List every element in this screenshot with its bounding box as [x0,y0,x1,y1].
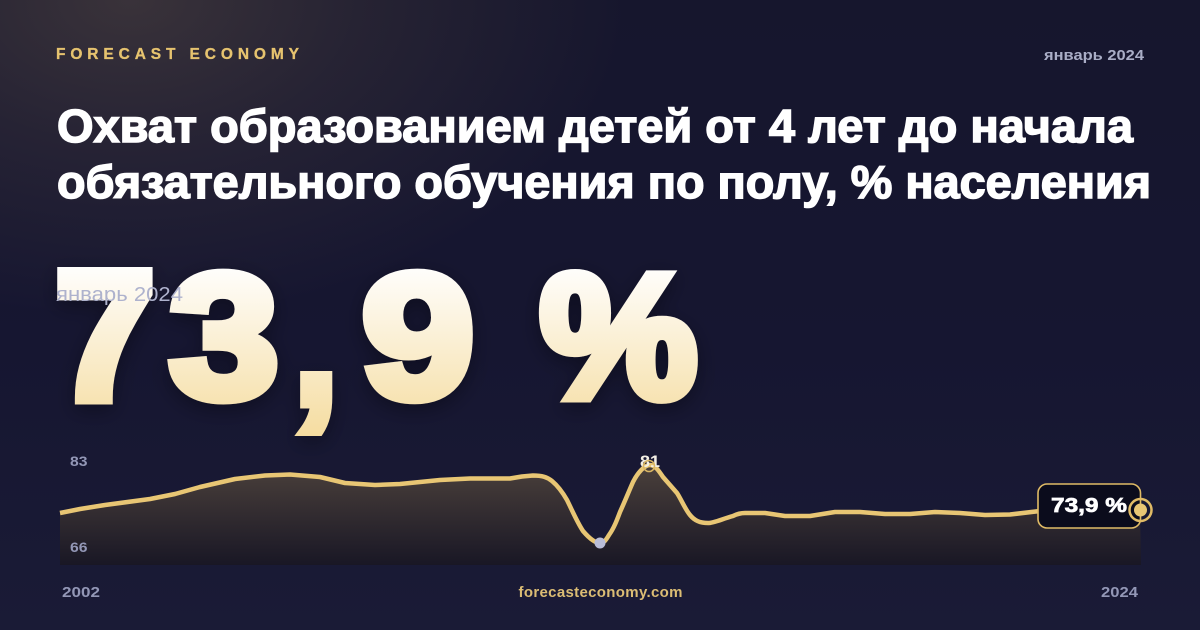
end year: 2024 [1101,584,1139,601]
start year: 2002 [62,584,100,601]
website: forecasteconomy.com [518,584,682,601]
peak label: 81 [640,452,660,471]
date label: январь 2024 [1044,47,1145,64]
peak marker [644,460,654,472]
big value [56,235,697,441]
date overlay on big value: январь 2024 [56,283,183,306]
value callout [1038,484,1140,528]
chart [60,452,1152,565]
brand label: FORECAST ECONOMY [56,46,300,63]
big value: % [540,239,697,435]
big value: , [294,242,338,441]
value callout: 73,9 % [1051,495,1127,517]
big value: 3 [170,239,278,435]
title [57,100,1151,208]
area fill [60,465,1141,565]
line [60,465,1140,543]
end marker [1130,499,1152,521]
axis min: 66 [70,539,88,555]
min marker [594,538,606,548]
big value: 9 [362,239,474,435]
axis max: 83 [70,453,88,469]
big value: 7 [56,235,154,437]
title: Охват образованием детей от 4 лет до начала [57,100,1133,152]
title: обязательного обучения по полу, % населения [57,156,1151,208]
